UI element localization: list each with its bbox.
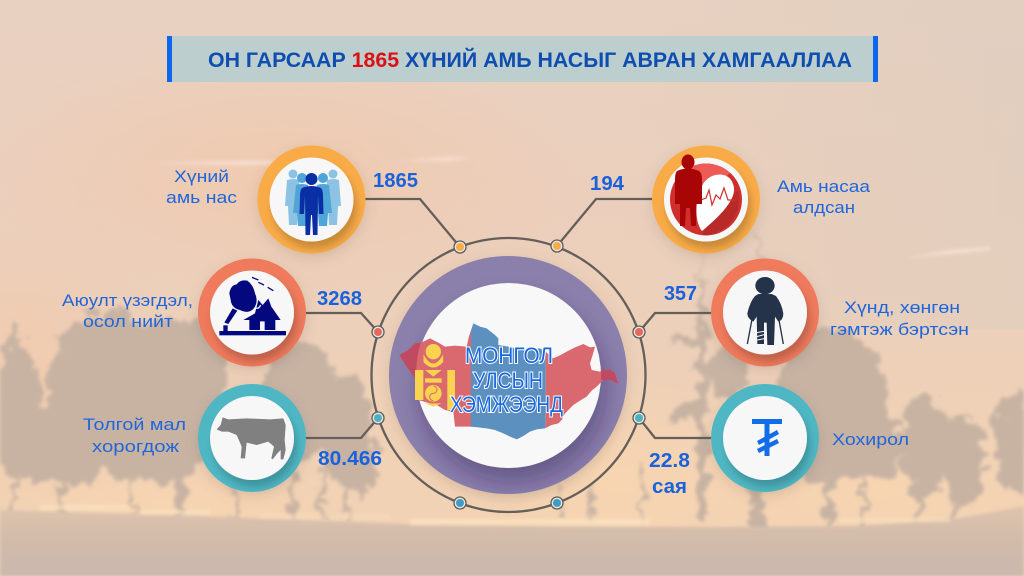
panel: lives saved [166,146,418,254]
map caption: МОНГОЛ [465,343,553,368]
panel: damage [649,384,909,498]
value: 22.8 million: 22.8 [649,450,690,472]
label: deaths: Амь насаа [777,177,871,196]
value: 3268: 3268 [317,288,362,310]
soyombo emblem [415,344,455,410]
icon: person on crutches [747,277,783,345]
icon: cow [217,417,286,459]
title text: ОН ГАРСААР 1865 ХҮНИЙ АМЬ НАСЫГ АВРАН ХАМГААЛЛАА [208,47,852,72]
value: 80.466: 80.466 [318,448,382,470]
panel: injured [664,258,969,366]
label: deaths [777,177,871,217]
map caption: УЛСЫН [473,368,543,393]
label: disasters: Аюулт үзэгдэл, [62,291,193,310]
label: livestock: хорогдож [92,437,180,456]
value: 357: 357 [664,283,697,305]
label: livestock: Толгой мал [83,415,186,434]
icon: group of people [285,170,341,235]
icon: tugrik sign [752,419,782,456]
value: 1865: 1865 [373,170,418,192]
label: livestock [83,415,186,456]
label: injured: гэмтэж бэртсэн [830,320,969,339]
label: injured: Хүнд, хөнгөн [844,298,960,317]
value: 22.8 million [649,450,690,498]
label: disasters [62,291,193,331]
map caption [450,343,563,417]
connector lines and outer ring [306,199,711,512]
label: people [166,167,238,207]
label: disasters: осол нийт [83,312,173,331]
value: 22.8 million: сая [652,476,687,498]
icon: tree falling on a house [219,277,286,335]
label: damage: Хохирол [832,430,909,449]
ring connector dots [372,240,645,509]
title banner [167,36,878,82]
label: people: Хүний [174,167,229,186]
panel: livestock [83,384,382,492]
map caption: ХЭМЖЭЭНД [450,392,563,417]
panel: disasters [62,258,362,366]
map of Mongolia in flag colours [400,324,618,440]
label: injured [830,298,969,339]
icon: heart with pulse [697,174,734,231]
value: 194: 194 [590,173,625,195]
icon: person in red [675,154,702,226]
label: deaths: алдсан [793,198,855,217]
panel: deaths [590,146,871,254]
central medallion: map of Mongolia [389,256,632,494]
label: people: амь нас [166,188,238,207]
